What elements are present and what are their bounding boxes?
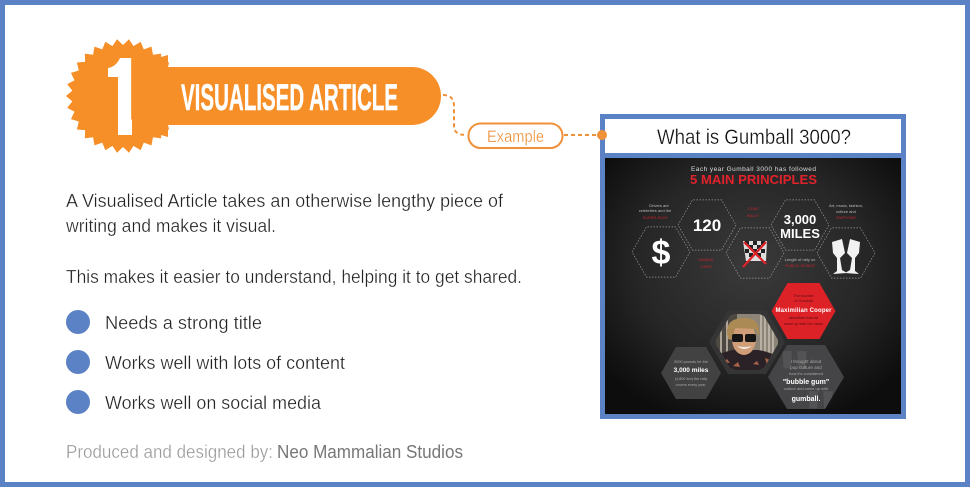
grey hexagon: bubble gum quote: pop culture and <box>790 365 822 370</box>
thumbnail content <box>632 166 875 409</box>
hexagon: dollar sign <box>632 227 690 277</box>
bullet: strong title: Needs a strong title <box>105 313 262 333</box>
dark thumbnail background <box>605 158 901 414</box>
dotted connector to example panel <box>564 134 600 136</box>
footer credit <box>66 442 463 462</box>
grey hexagon: 3,000 miles fact: 3,000 miles <box>674 367 709 374</box>
bullet: social media: Works well on social media <box>105 393 322 413</box>
thumbnail heading: 5 MAIN PRINCIPLES <box>690 172 817 187</box>
small hexagon captions <box>639 203 863 269</box>
panel title box <box>605 119 901 153</box>
header banner <box>66 37 441 158</box>
hexagon: chequered flag <box>726 228 784 278</box>
hexagon: dollar sign: $ <box>652 234 671 272</box>
grey hexagon: bubble gum quote: " <box>778 336 811 414</box>
grey hexagon: 3,000 miles fact: 5000 pounds for the <box>674 360 708 364</box>
second paragraph: This makes it easier to understand, helping it to get shared. <box>66 267 522 287</box>
hexagon: 3,000 miles: MILES <box>780 226 820 241</box>
hexagon: 120 unique cars <box>678 200 736 250</box>
small hexagon captions: Length of rally on <box>785 257 815 262</box>
hexagon: champagne glasses <box>817 228 875 278</box>
footer credit: Produced and designed by: <box>66 442 273 462</box>
bullet: lots of content: Works well with lots of content <box>105 353 345 373</box>
red hexagon: Maximilian Cooper: The founder <box>793 294 814 298</box>
grey hexagon: 3,000 miles fact <box>661 347 721 399</box>
panel border <box>600 114 906 419</box>
intro paragraph: writing and makes it visual. <box>65 216 276 236</box>
bullet: strong title <box>66 310 262 334</box>
dotted connector to example pill <box>443 95 466 135</box>
panel: example infographic <box>600 114 906 419</box>
small hexagon captions: Art, music, fashion, <box>829 203 863 208</box>
badge number: 1 <box>100 37 142 158</box>
photo hexagon <box>709 310 785 374</box>
heading text: VISUALISED ARTICLE <box>181 77 398 118</box>
small hexagon captions: UNIQUE <box>698 257 714 262</box>
example pill: Example <box>487 127 544 146</box>
grey hexagon: bubble gum quote: I thought about <box>791 359 822 364</box>
small hexagon captions: RALLY <box>747 213 760 218</box>
small hexagon captions: Drivers are <box>649 203 670 208</box>
grey hexagon: bubble gum quote <box>768 345 844 409</box>
panel title: What is Gumball 3000? <box>657 126 851 149</box>
red hexagon: Maximilian Cooper: of Gumball <box>794 299 813 303</box>
example pill <box>468 124 562 148</box>
small hexagon captions: celebrities and the <box>639 208 672 213</box>
footer credit: Neo Mammalian Studios <box>277 442 463 462</box>
small hexagon captions: SUPER-RICH <box>643 215 668 220</box>
intro paragraph <box>65 191 504 236</box>
intro paragraph: A Visualised Article takes an otherwise lengthy piece of <box>66 191 504 211</box>
small hexagon captions: 3 DAY <box>747 206 759 211</box>
small hexagon captions: PUBLIC ROADS <box>785 263 815 268</box>
grey hexagon: bubble gum quote: "bubble gum" <box>783 379 829 386</box>
grey hexagon: bubble gum quote: culture and came up with <box>784 386 828 391</box>
grey hexagon: bubble gum quote: " <box>804 376 837 454</box>
grey hexagon: bubble gum quote: gumball. <box>792 396 820 403</box>
small hexagon captions: culture and <box>836 209 856 214</box>
red hexagon: Maximilian Cooper <box>772 283 836 339</box>
heading bar <box>130 67 441 125</box>
hexagon: 120 unique cars: 120 <box>693 216 721 235</box>
grey hexagon: 3,000 miles fact: (4,800 km) the rally <box>675 377 707 381</box>
small hexagon captions: CARS <box>700 264 712 269</box>
grey hexagon: bubble gum quote: how it's considered <box>789 371 823 376</box>
thumbnail heading: Each year Gumball 3000 has followed <box>691 166 816 173</box>
red hexagon: Maximilian Cooper: came up with the name <box>784 322 823 326</box>
red hexagon: Maximilian Cooper: describes how he <box>789 316 818 320</box>
hexagon: 3,000 miles <box>771 200 829 250</box>
hexagon: 3,000 miles: 3,000 <box>784 212 816 227</box>
grey hexagon: 3,000 miles fact: covers every year. <box>676 383 706 387</box>
small hexagon captions: PARTYING <box>836 215 856 220</box>
orange dot on panel <box>597 130 607 140</box>
icon: starburst badge <box>66 39 180 153</box>
red hexagon: Maximilian Cooper: Maximilian Cooper <box>776 308 832 314</box>
